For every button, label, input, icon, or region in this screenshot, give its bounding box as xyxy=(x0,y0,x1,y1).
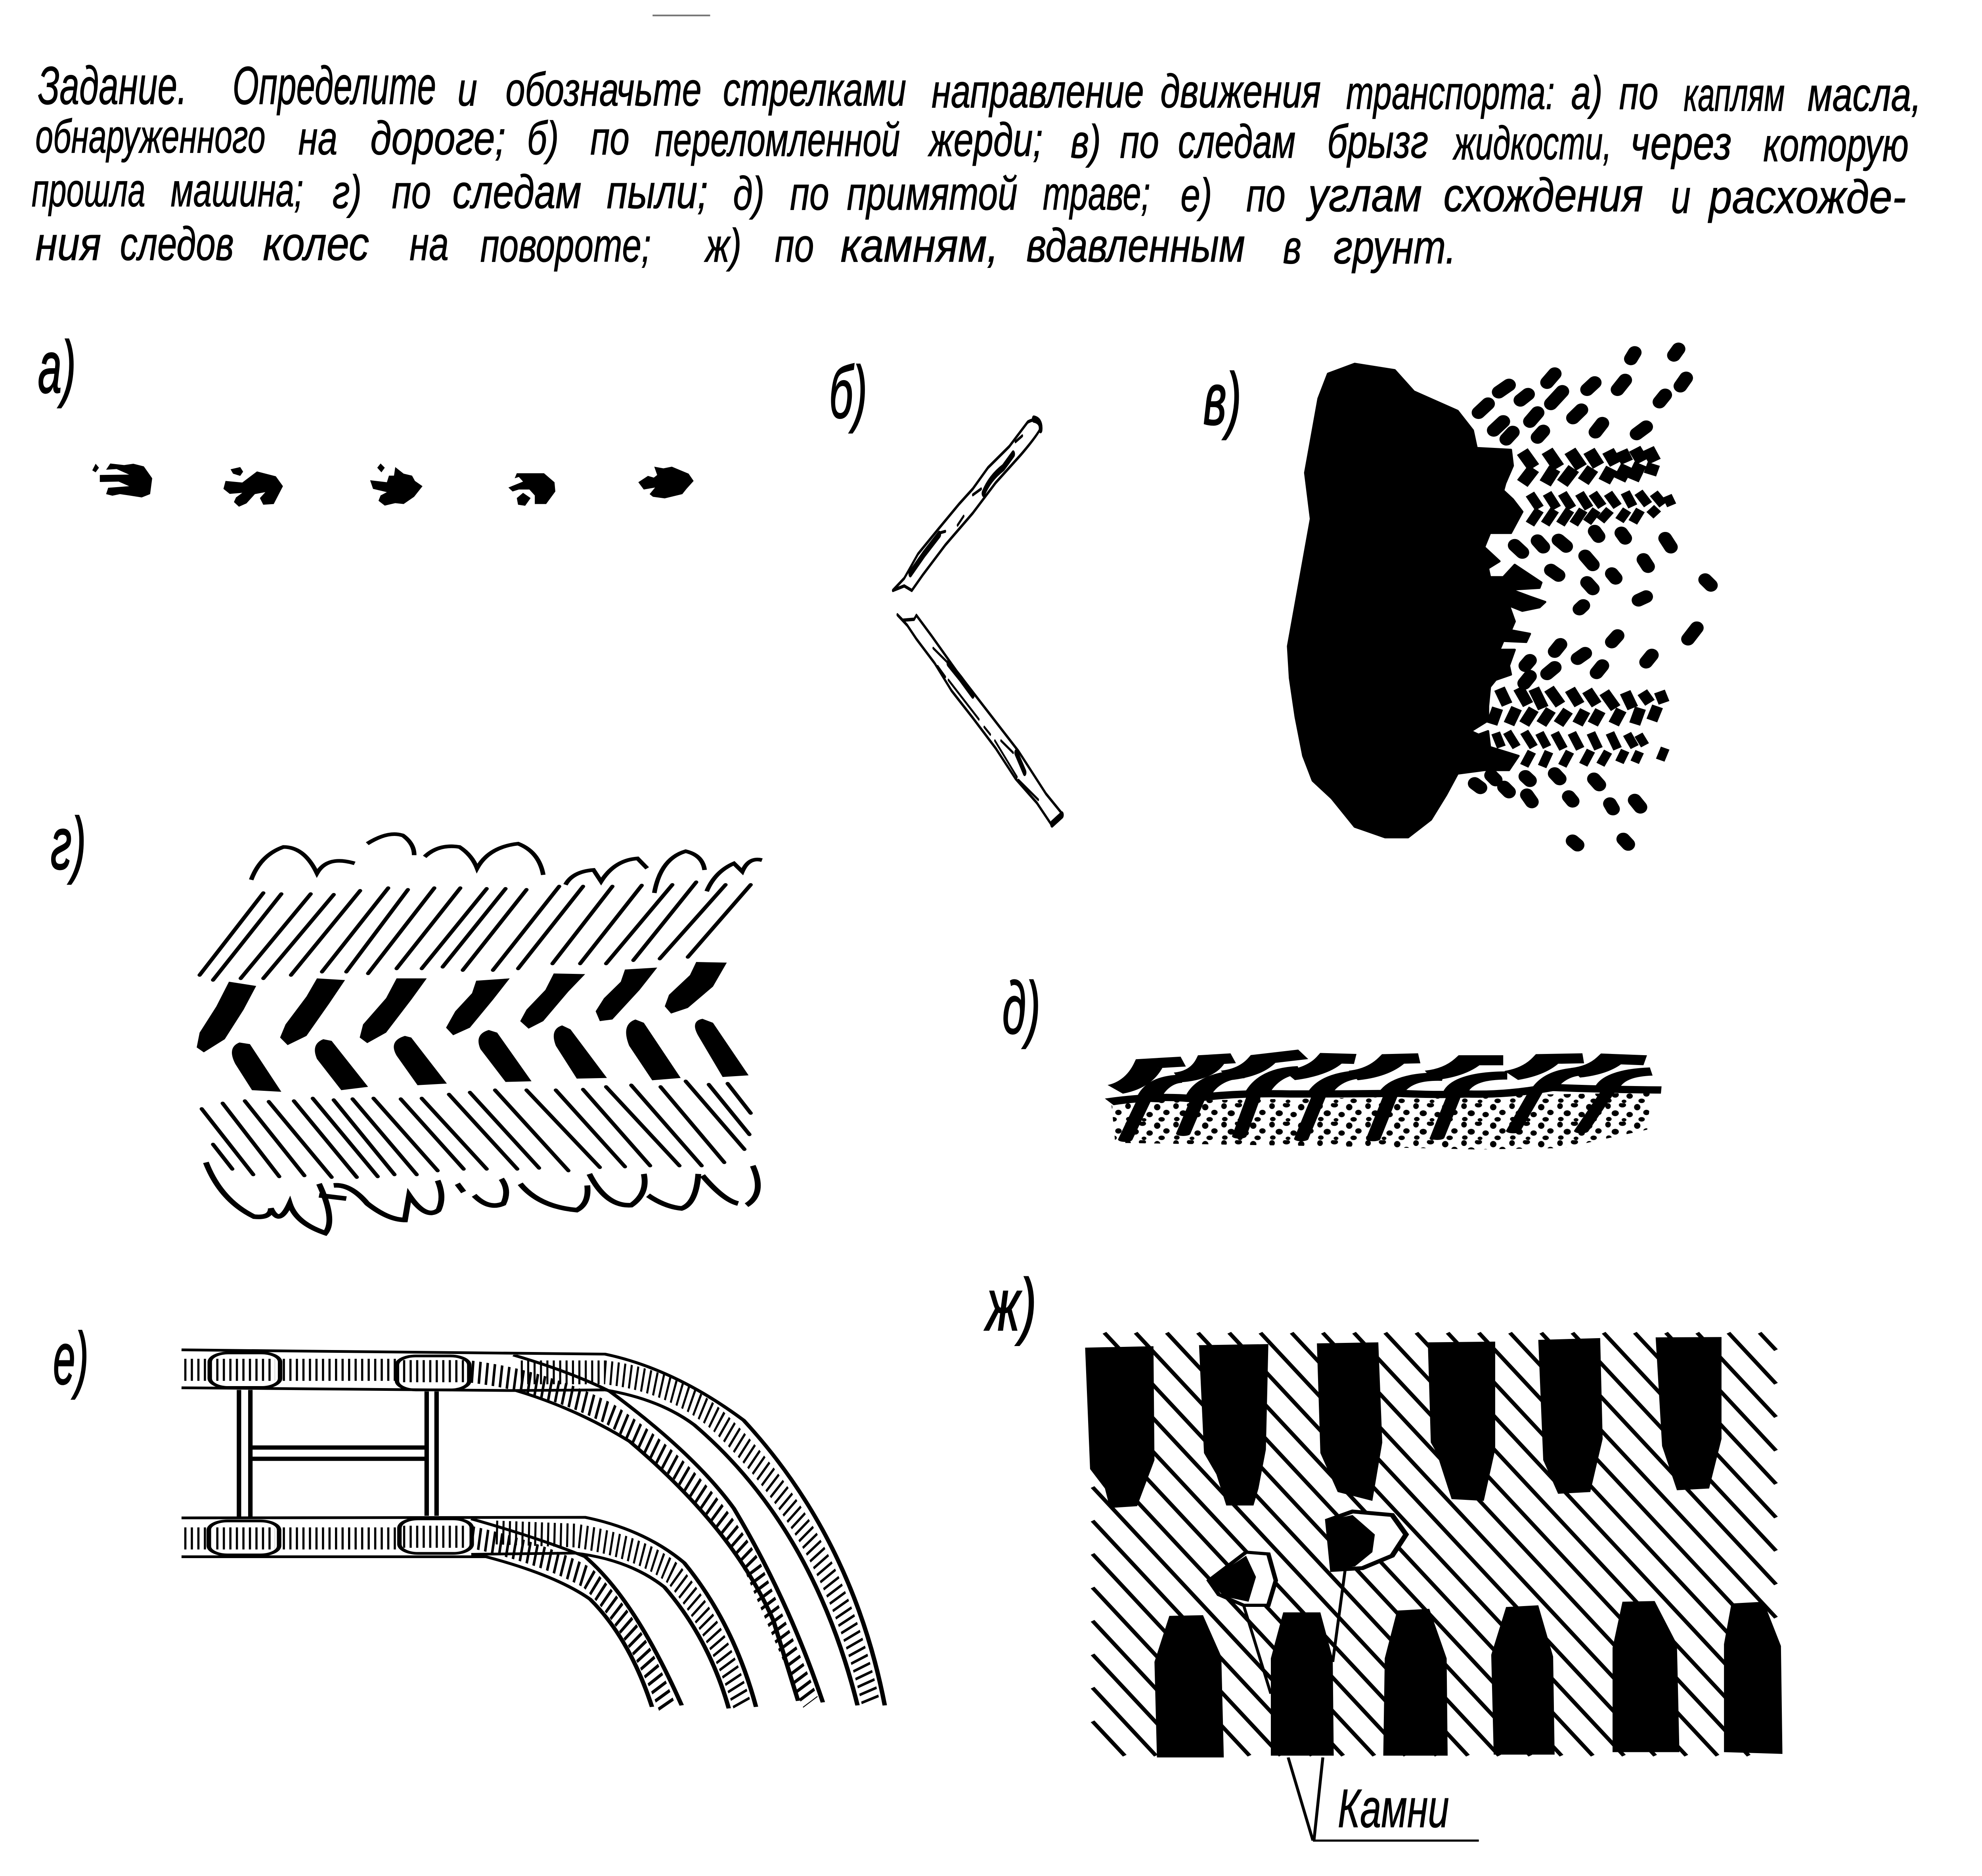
leader lines xyxy=(1244,1570,1479,1841)
tread ticks along outer curve, front axle xyxy=(521,1372,871,1705)
figure г: dust trails with tread marks xyxy=(197,834,762,1233)
lower tread blocks xyxy=(232,1019,748,1092)
ground line xyxy=(1109,1087,1661,1102)
splash droplets xyxy=(1475,349,1711,845)
text line 3: следам xyxy=(453,166,582,218)
tread ticks along inner curve, front axle xyxy=(471,1372,811,1702)
task text block xyxy=(32,55,1921,273)
soil speckle xyxy=(1111,1093,1651,1149)
figure д: flattened grass xyxy=(1109,1054,1661,1149)
figure а: oil drops on the road xyxy=(92,463,694,507)
text line 2 xyxy=(35,111,1909,171)
oil drop 4 xyxy=(509,473,555,506)
figure е: two-axle vehicle turning, converging tracks xyxy=(182,1350,885,1708)
text line 1: стрелками xyxy=(723,63,906,116)
label г): г) xyxy=(51,802,86,885)
text line 1: обозначьте xyxy=(505,63,702,116)
text line 4: повороте; xyxy=(480,220,651,272)
lower tread blocks xyxy=(1154,1601,1783,1757)
label е): е) xyxy=(53,1317,88,1400)
text line 1: движения xyxy=(1160,65,1321,118)
oil drop 1 xyxy=(92,463,152,497)
text line 1: а) xyxy=(1571,67,1603,119)
text line 3: углам xyxy=(1306,169,1422,222)
tread track 2 xyxy=(1530,492,1672,524)
label д): д) xyxy=(1002,967,1040,1049)
upper dust cloud xyxy=(251,834,762,893)
text line 1: каплям xyxy=(1684,69,1785,121)
text line 2: в) xyxy=(1071,116,1101,168)
text line 3: по xyxy=(392,166,431,218)
tread track 1 xyxy=(1522,449,1655,484)
axles xyxy=(239,1390,436,1517)
upper tread blocks xyxy=(1085,1337,1722,1508)
lower dust cloud xyxy=(206,1163,758,1233)
text line 3: траве; xyxy=(1043,168,1150,220)
label б): б) xyxy=(829,351,867,433)
figure в: liquid puddle with tread splashes xyxy=(1288,349,1711,845)
text line 1: масла, xyxy=(1808,69,1921,121)
text line 2: по xyxy=(1120,116,1159,168)
text line 3: пыли; xyxy=(607,166,708,218)
text line 1 xyxy=(38,55,1921,121)
text line 1: Задание. xyxy=(38,55,187,116)
text line 2: следам xyxy=(1178,116,1295,168)
text line 4: камням, xyxy=(840,220,999,272)
text line 1: по xyxy=(1619,67,1658,119)
text line 4: следов xyxy=(120,218,234,270)
text line 2: б) xyxy=(527,112,559,164)
figure ж: stones pressed into the ground xyxy=(1085,1333,1783,1841)
upper dust hatching xyxy=(200,882,751,980)
lower pole half xyxy=(897,615,1062,826)
text line 4: грунт. xyxy=(1333,221,1456,273)
text line 2: которую xyxy=(1763,119,1909,171)
text line 1: транспорта: xyxy=(1346,67,1555,119)
text line 3: и xyxy=(1671,171,1691,223)
text line 4: по xyxy=(775,220,814,272)
wheel 4 xyxy=(400,1519,472,1553)
text line 1: Определите xyxy=(233,55,436,116)
text line 4: в xyxy=(1283,221,1301,273)
text line 1: направление xyxy=(932,65,1144,118)
track edge lines xyxy=(182,1350,885,1708)
tread ticks along inner curve, rear axle xyxy=(471,1537,667,1707)
text line 2: жерди; xyxy=(928,114,1043,166)
stone 2 xyxy=(1328,1511,1406,1570)
text line 3: е) xyxy=(1180,169,1212,222)
label ж): ж) xyxy=(984,1264,1037,1346)
text line 4: на xyxy=(409,218,449,270)
figure б: broken pole xyxy=(893,419,1062,826)
tread track 3 xyxy=(1492,688,1664,724)
text line 3 xyxy=(32,164,1906,223)
label: камни: Камни xyxy=(1338,1778,1449,1839)
text line 3: по xyxy=(1246,169,1286,222)
text line 3: расхожде- xyxy=(1708,171,1906,223)
wheel 3 xyxy=(209,1521,279,1555)
track edges, wheels and frame xyxy=(182,1350,885,1708)
ground hatching xyxy=(1092,1333,1776,1756)
text line 3: примятой xyxy=(847,168,1018,220)
text line 4: ния xyxy=(35,218,101,270)
tread ticks along the straight tracks xyxy=(184,1370,466,1538)
text line 2: по xyxy=(590,112,629,164)
text line 2: обнаруженного xyxy=(35,111,266,163)
bent blades, upper row xyxy=(1115,1054,1645,1089)
text line 3: прошла xyxy=(32,164,145,217)
text line 3: д) xyxy=(733,168,765,220)
text line 3: машина; xyxy=(170,164,303,217)
puddle xyxy=(1288,364,1545,837)
wheel 1 xyxy=(210,1353,280,1387)
oil drop 2 xyxy=(224,467,283,507)
upper pole half xyxy=(893,419,1041,591)
bent blades, lower row xyxy=(1147,1070,1651,1102)
text line 4: ж) xyxy=(704,220,741,272)
text line 1: и xyxy=(457,63,477,116)
text line 3: схождения xyxy=(1443,169,1643,222)
tread track 4 xyxy=(1496,732,1665,767)
label в): в) xyxy=(1203,358,1241,440)
text line 2: через xyxy=(1630,117,1731,170)
label а): а) xyxy=(38,326,76,408)
grass stems xyxy=(1125,1093,1607,1140)
tread ticks along outer curve, rear axle xyxy=(496,1532,742,1707)
text line 2: дороге; xyxy=(370,112,505,164)
oil drop 3 xyxy=(370,463,423,506)
text line 3: по xyxy=(790,168,829,220)
lower dust hatching xyxy=(202,1081,751,1177)
oil drop 5 xyxy=(638,467,694,498)
text line 3: г) xyxy=(333,166,362,218)
upper tread blocks xyxy=(197,962,727,1052)
text line 4: вдавленным xyxy=(1026,220,1245,272)
figure labels xyxy=(38,326,1241,1400)
text line 2: жидкости, xyxy=(1452,117,1612,170)
text line 2: брызг xyxy=(1327,116,1428,168)
decorative scan speck xyxy=(652,15,710,16)
text line 4: колес xyxy=(263,218,369,270)
stone 1 xyxy=(1209,1552,1276,1605)
text line 2: на xyxy=(298,112,337,164)
text line 2: переломленной xyxy=(655,114,900,166)
text line 4 xyxy=(35,218,1456,273)
frame beam xyxy=(251,1448,426,1459)
wheel 2 xyxy=(397,1356,469,1390)
